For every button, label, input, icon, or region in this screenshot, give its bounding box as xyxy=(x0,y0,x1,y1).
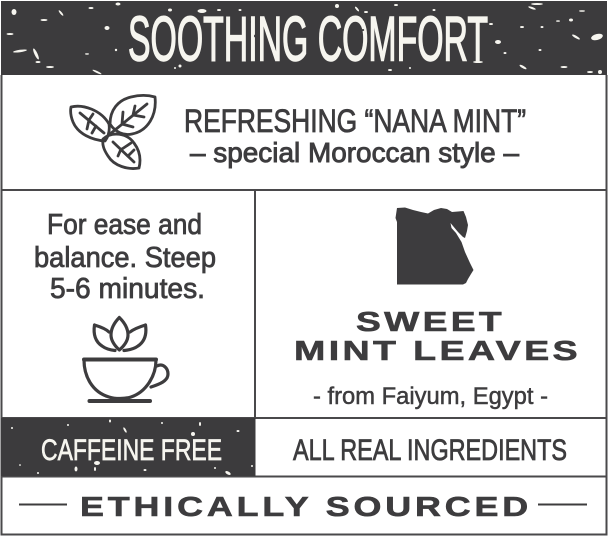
text block: sweet mint leaves: MINT LEAVES xyxy=(294,335,581,366)
panel: caffeine free xyxy=(1,418,256,476)
icon: map of Egypt xyxy=(396,208,474,284)
text block: refreshing nana mint: – special Moroccan style – xyxy=(190,137,519,168)
label: caffeine free: CAFFEINE FREE xyxy=(41,434,222,467)
text block: steeping directions: balance. Steep xyxy=(34,242,216,274)
icon: tea cup with leaves xyxy=(84,318,168,401)
text: origin: - from Faiyum, Egypt - xyxy=(313,383,548,410)
icon: mint leaves xyxy=(71,96,155,168)
footer: ethically sourced: ETHICALLY SOURCED xyxy=(80,491,532,522)
text block: sweet mint leaves xyxy=(294,306,581,366)
text block: sweet mint leaves: SWEET xyxy=(356,306,505,337)
text block: refreshing nana mint: REFRESHING “NANA MINT” xyxy=(184,103,526,139)
text block: steeping directions: 5-6 minutes. xyxy=(50,273,205,305)
text block: steeping directions xyxy=(34,209,216,305)
panel: header banner xyxy=(1,1,607,75)
text block: steeping directions: For ease and xyxy=(47,209,202,241)
text block: refreshing nana mint xyxy=(184,103,526,168)
